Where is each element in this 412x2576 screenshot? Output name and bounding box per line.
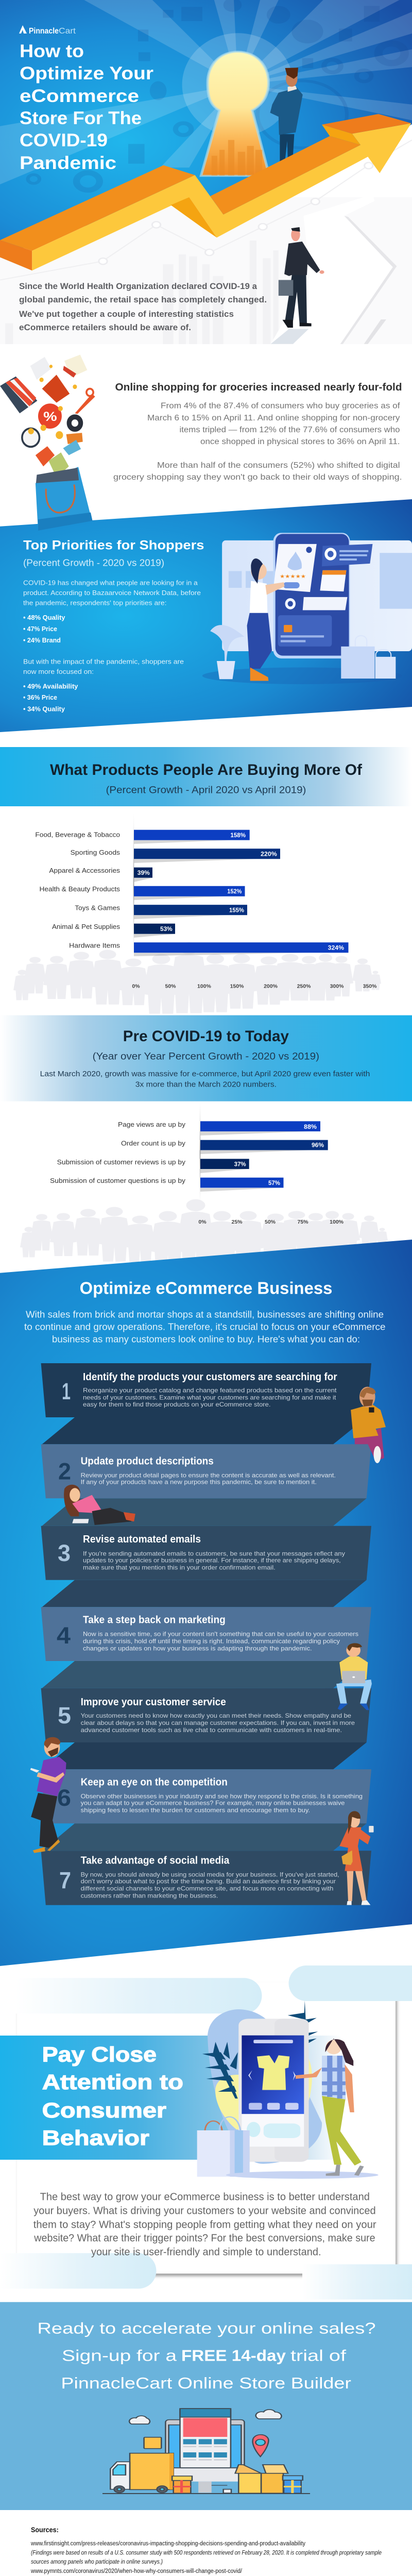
call to action text: PinnacleCart Online Store Builder <box>61 2374 351 2392</box>
call to action text <box>37 2319 376 2392</box>
step 7: By now, you should already be using social media for your business. If you've just started, <box>81 1871 339 1878</box>
top priorities subheading: (Percent Growth - 2020 vs 2019) <box>23 558 164 568</box>
grocery section body text: March 6 to 15% on April 11. And online shopping for non-grocery <box>147 414 400 422</box>
call to action text: trial of <box>290 2347 346 2365</box>
call to action text: Sign-up for a <box>62 2347 177 2365</box>
bar chart: product growth: 300% <box>330 983 344 989</box>
optimize intro text: to continue and grow operations. Therefore, it's crucial to focus on your eCommerce <box>24 1321 385 1332</box>
bar chart: product growth: 39% <box>138 869 150 876</box>
illustration: woman with giant phone and bags <box>197 2001 379 2179</box>
intro text: eCommerce retailers should be aware of. <box>19 323 191 332</box>
hero pale chart background <box>0 140 412 344</box>
hero illustration <box>0 0 412 344</box>
step 2: If any of your products have a new purpose this pandemic, be sure to mention it. <box>81 1478 317 1485</box>
banner subtitle and text <box>40 1051 370 1089</box>
sources list: www.pymnts.com/coronavirus/2020/when-how-why-consumers-will-change-post-covid/ <box>30 2568 243 2574</box>
step 7: customers rather than marketing the business. <box>81 1892 218 1899</box>
people silhouettes behind charts <box>13 942 381 1014</box>
sources list: Sources: <box>31 2526 59 2534</box>
banner subtitle: (Percent Growth - April 2020 vs April 2019) <box>106 785 306 795</box>
banner: pre COVID-19 <box>0 1015 412 1101</box>
step 7: Take advantage of social media <box>81 1855 230 1867</box>
bar chart: year over year: 100% <box>330 1219 344 1225</box>
grocery section body text: More than half of the consumers (52%) who shifted to digital <box>157 461 400 470</box>
step 1: Identify the products your customers are searching for <box>83 1371 337 1383</box>
consumer behavior text <box>33 2192 376 2258</box>
optimize intro text: business as many customers look online to buy. Here's what you can do: <box>52 1333 360 1344</box>
banner subtitle and text: 3x more than the March 2020 numbers. <box>135 1080 277 1089</box>
bar chart: product growth: 200% <box>264 983 278 989</box>
main title <box>20 41 153 173</box>
main title: How to <box>20 41 84 61</box>
bar chart: product growth: 250% <box>297 983 311 989</box>
step 3: 3 <box>58 1540 71 1566</box>
main title: Pandemic <box>20 153 116 173</box>
step 5: advanced customer tools such as live chat to communicate with customers in real-time. <box>81 1726 342 1734</box>
grocery section body text <box>113 402 402 482</box>
brand logo: header <box>19 25 76 36</box>
step 5 <box>41 1688 371 1742</box>
bar chart: year over year: 37% <box>234 1160 246 1167</box>
bar chart: product growth: 155% <box>229 907 244 914</box>
bar chart: product growth: 350% <box>363 983 377 989</box>
blue panel: optimize business <box>0 1240 412 1966</box>
grocery section body text: From 4% of the 87.4% of consumers who buy groceries as of <box>161 402 400 410</box>
connector bands between steps <box>42 1417 367 1851</box>
optimize intro text <box>24 1309 385 1344</box>
step 7: different social channels to your eCommerce site, and focus more on connecting with <box>81 1885 333 1892</box>
step 1 <box>41 1363 371 1417</box>
step 4: during this crisis, hold off until the timing is right. Instead, communicate regarding policy <box>83 1637 340 1645</box>
bar chart: year over year: 96% <box>312 1142 324 1149</box>
step 7: 7 <box>59 1867 71 1893</box>
faint background icons <box>28 0 405 190</box>
person: woman lying with tablet, step 2 <box>64 1485 135 1525</box>
person: man with laptop, step 4 <box>336 1643 372 1710</box>
sources list: www.firstinsight.com/press-releases/coronavirus-impacting-shopping-decisions-spending-and-product-availability <box>30 2541 305 2547</box>
bar chart: year over year: 57% <box>268 1179 280 1187</box>
step 5: Improve your customer service <box>81 1697 226 1708</box>
call to action panel <box>0 2302 412 2510</box>
consumer behavior text: your site is user-friendly and simple to understand. <box>91 2246 321 2258</box>
call to action text: FREE 14-day <box>181 2347 286 2365</box>
step 3 <box>41 1526 371 1580</box>
bar chart: year over year: 25% <box>231 1219 243 1225</box>
consumer behavior text: them to stay? What's stopping people from getting what they need on your <box>33 2219 376 2230</box>
step 1: easy for them to find those products on your eCommerce store. <box>83 1401 271 1408</box>
person: woman in orange dress with phone, step 7 <box>339 1811 374 1905</box>
bar chart: year over year: Page views are up by <box>118 1121 186 1128</box>
consumer behavior card <box>17 1982 396 2274</box>
light rays <box>0 0 412 184</box>
step 3: make sure that you mention this in your order confirmation email. <box>83 1564 276 1571</box>
top priorities text block: the pandemic, respondents' top priorities are: <box>23 600 167 607</box>
grocery section body text: grocery shopping say they won't go back to their old ways of shopping. <box>113 473 402 482</box>
bar chart: product growth: 158% <box>230 832 246 839</box>
person: man with phone, step 1 <box>351 1387 386 1463</box>
grocery section body text: once shopped in physical stores to 36% on April 11. <box>200 437 400 446</box>
top priorities bullet lists <box>23 614 78 713</box>
illustration: woman using giant phone <box>202 533 412 684</box>
step 4 <box>41 1607 371 1661</box>
bar chart: product growth: 152% <box>227 888 242 895</box>
consumer behavior heading: Behavior <box>42 2126 149 2149</box>
call to action text: Ready to accelerate your online sales? <box>37 2319 376 2337</box>
optimize intro text: With sales from brick and mortar shops at a standstill, businesses are shifting online <box>26 1309 384 1319</box>
consumer behavior text: website? What are their trigger points? For the best conversions, make sure <box>33 2233 375 2244</box>
decorative pills <box>0 1965 412 2299</box>
bar chart: year over year: Submission of customer questions is up by <box>50 1177 186 1184</box>
intro text <box>19 282 267 332</box>
step 2: Update product descriptions <box>81 1455 214 1467</box>
step 6: shipping fees to lessen the burden for customers and encourage them to buy. <box>81 1807 310 1814</box>
bar chart: year over year: Submission of customer reviews is up by <box>57 1158 186 1166</box>
keyhole <box>201 52 269 176</box>
walking businessman with briefcase <box>271 227 324 344</box>
bar chart: product growth: 324% <box>328 944 344 951</box>
illustration: shopping bag with flying items: % <box>43 410 57 424</box>
intro text: We've put together a couple of interesting statistics <box>19 310 234 319</box>
top priorities bullet lists: • 49% Availability <box>23 683 78 690</box>
banner: what products <box>0 747 412 806</box>
banner subtitle and text: Last March 2020, growth was massive for e-commerce, but April 2020 grew even faster with <box>40 1070 370 1078</box>
step 1: Reorganize your product catalog and change featured products based on the current <box>83 1387 337 1394</box>
people silhouettes behind second chart <box>20 1199 388 1271</box>
consumer behavior text: your buyers. What is driving your customers to your website and convinced <box>33 2205 376 2216</box>
step 4: 4 <box>57 1622 71 1649</box>
grocery section heading: Online shopping for groceries increased nearly four-fold <box>115 382 402 393</box>
brand logo: header: Cart <box>59 27 76 36</box>
bar chart: product growth: 150% <box>230 983 244 989</box>
main title: Store For The <box>20 108 142 128</box>
banner title: Pre COVID-19 to Today <box>123 1028 289 1045</box>
bar chart: year over year: 50% <box>265 1219 276 1225</box>
step 2: 2 <box>58 1459 71 1485</box>
bar chart: year over year: 88% <box>304 1123 317 1130</box>
bar chart: product growth: 100% <box>197 983 211 989</box>
brand logo: header: Pinnacle <box>29 27 59 36</box>
grocery section body text: items tripled — from 12% of the 77.6% of consumers who <box>179 426 400 434</box>
businessman looking at keyhole <box>270 67 303 161</box>
consumer behavior text: The best way to grow your eCommerce business is to better understand <box>40 2192 370 2203</box>
person: bearded man with phone, step 6 <box>30 1737 66 1853</box>
bar chart: year over year: 75% <box>297 1219 308 1225</box>
bar chart: product growth: Apparel & Accessories <box>49 867 121 874</box>
main title: Optimize Your <box>20 63 153 83</box>
top priorities bullet lists: • 48% Quality <box>23 614 65 621</box>
step 4: changes or updates on how your business is adapting through the pandemic. <box>83 1645 312 1652</box>
step 3: updates to your policies or business in general. For instance, if there are shipping delays, <box>83 1557 341 1564</box>
step 6 <box>41 1769 371 1823</box>
bar chart: product growth: Food, Beverage & Tobacco <box>35 831 120 838</box>
step 2 <box>41 1444 371 1498</box>
step 7: don't worry about what to post for the time being. Build an audience first by linking your <box>81 1878 336 1885</box>
consumer behavior heading: Attention to <box>42 2070 183 2094</box>
bar chart: product growth: 53% <box>160 925 173 933</box>
top priorities text block <box>23 580 201 675</box>
blue panel: top priorities <box>0 499 412 732</box>
bar chart: product growth: Health & Beauty Products <box>39 885 121 893</box>
bar chart: year over year <box>50 1103 344 1225</box>
intro text: global pandemic, the retail space has completely changed. <box>19 295 267 304</box>
banner subtitle and text: (Year over Year Percent Growth - 2020 vs 2019) <box>93 1051 319 1062</box>
top priorities bullet lists: • 47% Price <box>23 625 57 633</box>
step 6: Keep an eye on the competition <box>81 1777 228 1788</box>
step 1: 1 <box>62 1378 71 1404</box>
top priorities bullet lists: • 34% Quality <box>23 706 65 713</box>
step 2: Review your product detail pages to ensure the content is accurate as well as relevant. <box>81 1471 336 1479</box>
step 4: Take a step back on marketing <box>83 1615 226 1626</box>
banner title: What Products People Are Buying More Of <box>50 761 363 778</box>
bar chart: product growth: Sporting Goods <box>71 849 121 856</box>
bar chart: product growth: 50% <box>165 983 176 989</box>
bar chart: year over year: 0% <box>198 1219 207 1225</box>
step 3: Revise automated emails <box>83 1534 201 1545</box>
top priorities text block: COVID-19 has changed what people are looking for in a <box>23 580 198 587</box>
bar chart: product growth: 220% <box>261 850 277 857</box>
top priorities heading: Top Priorities for Shoppers <box>23 538 204 553</box>
bar chart: product growth: 0% <box>132 983 140 989</box>
white paper arrow <box>271 194 397 344</box>
step 4: Now is a sensitive time, so if your content isn't something that can be useful to your customers <box>83 1631 358 1638</box>
step 6: you can adapt to your eCommerce business? For example, many online businesses waive <box>81 1800 345 1807</box>
step 7 <box>41 1851 371 1905</box>
step 5: clear about delays so that you can manage customer expectations. If you can, invest in more <box>81 1719 355 1726</box>
step 5: 5 <box>58 1702 71 1728</box>
intro text: Since the World Health Organization declared COVID-19 a <box>19 282 258 291</box>
bar chart: product growth: Animal & Pet Supplies <box>52 923 121 930</box>
hero blue background <box>0 0 412 257</box>
step 5: Your customers need to know how exactly you can meet their needs. Show empathy and be <box>81 1712 351 1719</box>
consumer behavior heading: Consumer <box>42 2098 166 2122</box>
top priorities bullet lists: • 24% Brand <box>23 637 61 644</box>
rising orange arrow <box>0 114 411 270</box>
main title: eCommerce <box>20 86 139 106</box>
keyhole halo <box>182 33 294 137</box>
illustration: shopping bag with flying items <box>0 354 95 531</box>
bar chart: product growth <box>35 813 377 989</box>
optimize heading: Optimize eCommerce Business <box>80 1279 332 1298</box>
step 3: If you're sending automated emails to customers, be sure that your messages reflect any <box>83 1550 345 1557</box>
top priorities bullet lists: • 36% Price <box>23 694 57 701</box>
sources list <box>30 2526 382 2576</box>
step 6: Observe other businesses in your industry and see how they respond to the crisis. Is it something <box>81 1792 363 1800</box>
top priorities text block: But with the impact of the pandemic, shoppers are <box>23 658 184 665</box>
illustration: delivery truck, monitor and boxes <box>102 2409 310 2494</box>
consumer behavior heading <box>42 2043 183 2149</box>
step 6: 6 <box>57 1785 71 1811</box>
banner: pay close attention <box>0 2036 341 2160</box>
top priorities text block: product. According to Bazaarvoice Network Data, before <box>23 589 201 597</box>
top priorities text block: now more focused on: <box>23 668 94 675</box>
bar chart: product growth: Toys & Games <box>75 904 121 912</box>
illustration: woman using giant phone: ★★★★★ <box>280 574 306 580</box>
bar chart: product growth: Hardware Items <box>69 942 121 950</box>
main title: COVID-19 <box>20 130 108 150</box>
bar chart: year over year: Order count is up by <box>121 1139 186 1147</box>
consumer behavior heading: Pay Close <box>42 2043 157 2066</box>
step 1: needs of your customers. Examine what your customers are searching for and make it <box>83 1394 336 1401</box>
sources list: sources among panels who participate in online surveys.) <box>31 2559 163 2565</box>
